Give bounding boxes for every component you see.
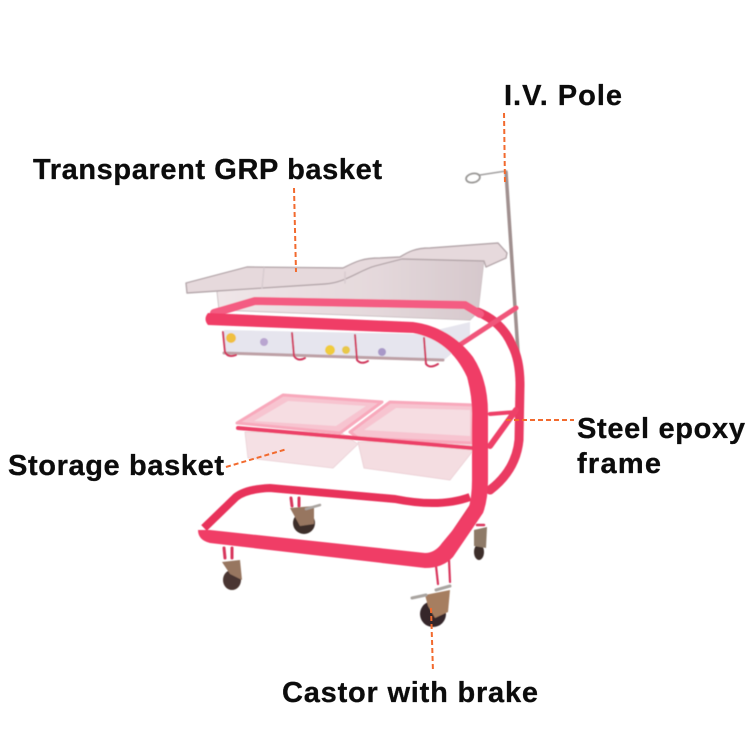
- basket hooks: [223, 332, 438, 366]
- illustration: baby cart: [186, 171, 520, 627]
- shelf front bar: [238, 428, 472, 448]
- right caster: [474, 525, 487, 560]
- front caster with brake: [412, 560, 450, 627]
- mattress fabric: [224, 322, 470, 361]
- rear caster: [290, 498, 320, 534]
- label: Storage basket: Storage basket: [8, 450, 224, 482]
- transparent GRP basket: [186, 243, 507, 320]
- callout line: storage: [226, 449, 287, 467]
- I.V. pole: [465, 171, 518, 352]
- top rim back: [214, 301, 480, 314]
- label: Steel epoxy frame: frame: [577, 448, 661, 480]
- casters: [222, 498, 487, 627]
- storage baskets: [237, 395, 474, 480]
- label: Steel epoxy frame: Steel epoxy: [577, 413, 745, 445]
- left caster: [222, 548, 242, 590]
- left tray: [237, 395, 382, 468]
- callout line: basket: [294, 188, 296, 272]
- storage tray shelf back: [490, 410, 516, 446]
- label: Transparent GRP basket: Transparent GRP basket: [33, 154, 382, 186]
- right tray: [350, 402, 474, 480]
- callout line: pole: [504, 113, 505, 184]
- label: Steel epoxy frame: [577, 413, 745, 480]
- callout line: frame: [506, 419, 574, 421]
- label: I.V. Pole: I.V. Pole: [504, 80, 622, 112]
- label: Castor with brake: Castor with brake: [282, 677, 538, 709]
- rear C frame tube: [478, 312, 520, 490]
- pole holder bar: [458, 308, 516, 346]
- callout line: castor: [431, 608, 433, 672]
- steel epoxy frame: [198, 313, 488, 568]
